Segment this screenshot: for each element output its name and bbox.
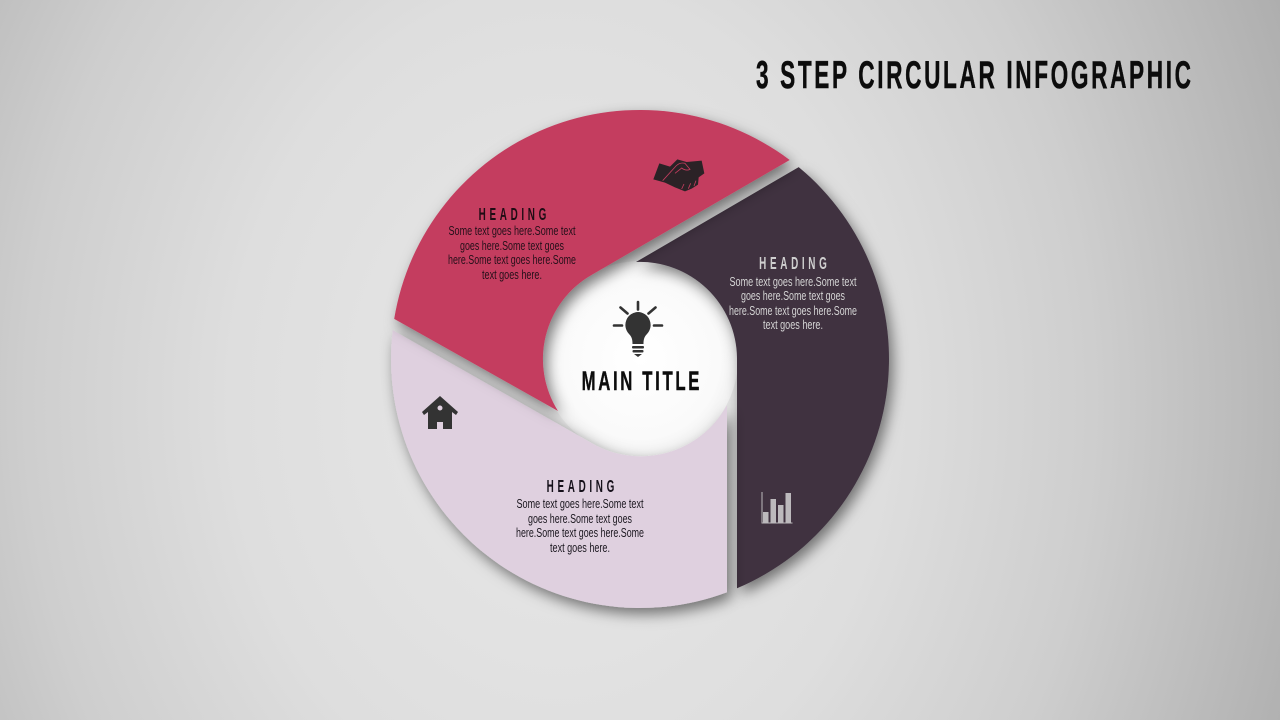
panel: lilac segment — [391, 330, 727, 608]
dark segment shape — [636, 167, 889, 588]
lilac segment shape — [391, 330, 727, 608]
lilac segment heading: HEADING — [547, 477, 614, 497]
icon: light bulb — [614, 302, 662, 357]
red segment shape — [394, 110, 790, 411]
dark segment text: text goes here. — [763, 318, 823, 332]
dark segment text: goes here.Some text goes — [741, 289, 845, 303]
lilac segment text: here.Some text goes here.Some — [516, 526, 644, 540]
panel: dark segment — [636, 167, 889, 588]
icon: bar chart — [762, 492, 792, 524]
red segment text: text goes here. — [482, 268, 542, 282]
lilac segment text: goes here.Some text goes — [528, 512, 632, 526]
lilac segment text: Some text goes here.Some text — [516, 497, 644, 511]
main title text: MAIN TITLE — [582, 366, 699, 396]
dark segment heading: HEADING — [759, 254, 827, 274]
red segment text: Some text goes here.Some text — [448, 224, 576, 238]
icon: house — [422, 396, 458, 429]
dark segment text: here.Some text goes here.Some — [729, 304, 857, 318]
red segment text — [448, 224, 576, 282]
red segment text: here.Some text goes here.Some — [448, 253, 576, 267]
lilac segment text: text goes here. — [550, 541, 610, 555]
main title block — [582, 302, 699, 396]
panel: red segment — [394, 110, 790, 411]
title: 3 STEP CIRCULAR INFOGRAPHIC — [756, 53, 1191, 97]
centre disc — [542, 261, 738, 457]
lilac segment text — [516, 497, 644, 555]
dark segment text — [729, 275, 857, 332]
dark segment text: Some text goes here.Some text — [730, 275, 857, 289]
icon: handshake — [653, 159, 704, 191]
red segment text: goes here.Some text goes — [460, 239, 564, 253]
red segment heading: HEADING — [479, 205, 546, 225]
